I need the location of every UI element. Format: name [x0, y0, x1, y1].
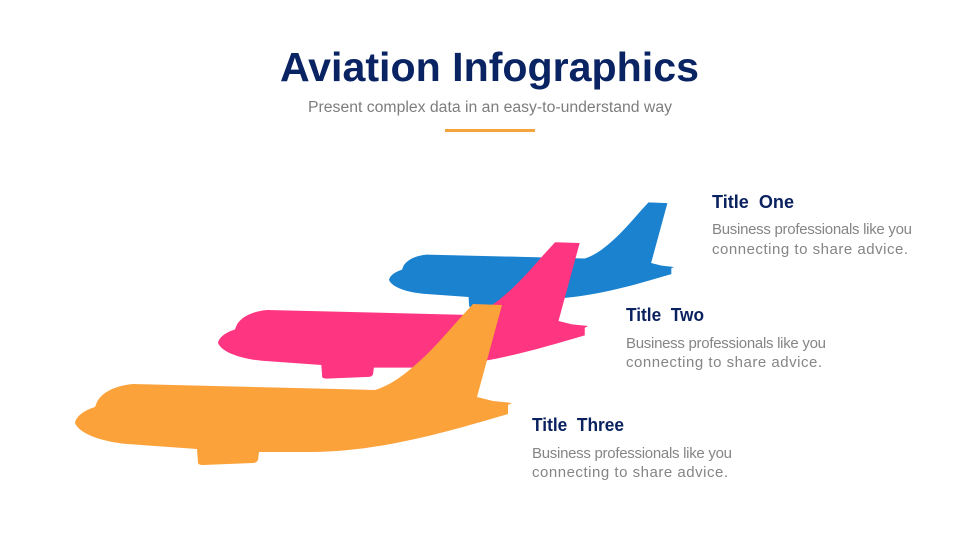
- icon: pink airplane: [218, 242, 588, 379]
- heading: title one: Title One: [712, 192, 794, 212]
- title: Aviation Infographics: [280, 44, 699, 90]
- text block: title three: [532, 415, 732, 481]
- description: title three: Business professionals like you: [532, 445, 732, 462]
- icon: orange airplane: [75, 304, 512, 465]
- text block: title one: [712, 192, 912, 258]
- icon: blue airplane: [389, 202, 674, 307]
- description: title two: Business professionals like you: [626, 335, 826, 352]
- description: title two: connecting to share advice.: [626, 354, 822, 371]
- subtitle: Present complex data in an easy-to-understand way: [308, 99, 672, 116]
- description: title one: Business professionals like you: [712, 221, 912, 238]
- description: title one: connecting to share advice.: [712, 241, 908, 258]
- heading: title three: Title Three: [532, 415, 624, 435]
- heading: title two: Title Two: [626, 305, 704, 325]
- text block: title two: [626, 305, 826, 371]
- title underline: [445, 129, 535, 132]
- description: title three: connecting to share advice.: [532, 464, 728, 481]
